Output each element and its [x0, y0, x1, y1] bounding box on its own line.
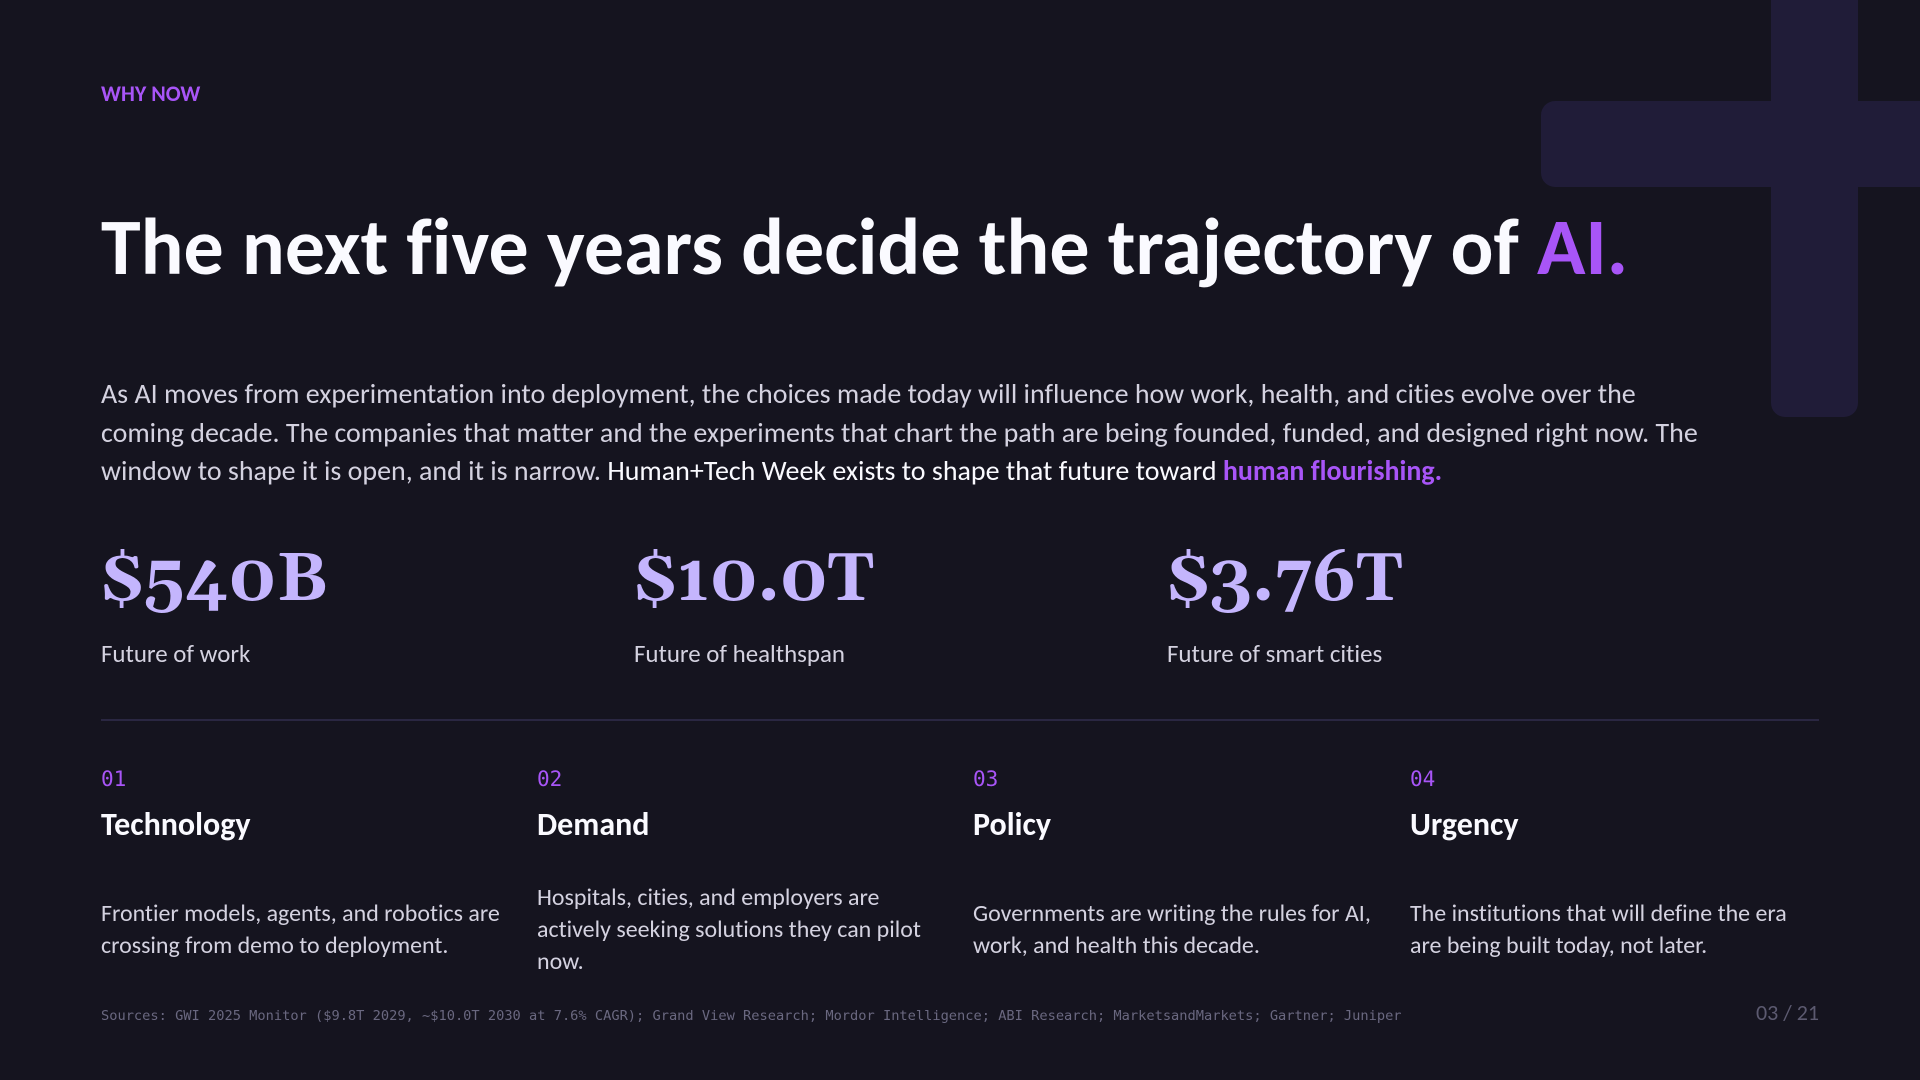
pillar 01 description: crossing from demo to deployment. — [101, 931, 448, 960]
page number: 03 / 21 — [1756, 999, 1819, 1026]
pillar 02 heading: Demand — [537, 805, 649, 844]
pillar 02 description: now. — [537, 947, 584, 976]
pillar 04 description — [1410, 899, 1787, 960]
pillar 03 heading: Policy — [973, 805, 1051, 844]
pillar 04 number: 04 — [1410, 767, 1435, 791]
body paragraph — [101, 376, 1698, 488]
pillar 04 description: are being built today, not later. — [1410, 931, 1707, 960]
pillar 01 description: Frontier models, agents, and robotics are — [101, 899, 500, 928]
pillar 03 description — [973, 899, 1371, 960]
eyebrow label: WHY NOW — [101, 80, 200, 107]
pillar 02 description — [537, 883, 921, 976]
body paragraph: window to shape it is open, and it is narrow. Human+Tech Week exists to shape that future toward human flourishing. — [101, 453, 1442, 488]
pillar 02 description: Hospitals, cities, and employers are — [537, 883, 879, 912]
stat label: future of healthspan: Future of healthspan — [634, 638, 845, 669]
pillar 02 number: 02 — [537, 767, 562, 791]
decorative cross: vertical bar — [1771, 0, 1858, 417]
decorative cross: horizontal bar — [1541, 101, 1920, 187]
pillar 01 heading: Technology — [101, 805, 251, 844]
body paragraph: As AI moves from experimentation into deployment, the choices made today will influence how work, health, and cities evolve over the — [101, 376, 1636, 411]
pillar 04 description: The institutions that will define the era — [1410, 899, 1787, 928]
title: The next five years decide the trajectory of AI. — [101, 199, 1628, 296]
pillar 03 description: Governments are writing the rules for AI, — [973, 899, 1371, 928]
body paragraph: coming decade. The companies that matter and the experiments that chart the path are being founded, funded, and designed right now. The — [101, 415, 1698, 450]
pillar 03 number: 03 — [973, 767, 998, 791]
stat: future of healthspan: $10.0T — [633, 538, 874, 624]
stat label: future of smart cities: Future of smart cities — [1167, 638, 1382, 669]
pillar 04 heading: Urgency — [1410, 805, 1519, 844]
stat: future of smart cities: $3.76T — [1166, 538, 1403, 624]
pillar 01 number: 01 — [101, 767, 126, 791]
pillar 02 description: actively seeking solutions they can pilot — [537, 915, 921, 944]
pillar 01 description — [101, 899, 500, 960]
stat: future of work: $540B — [100, 538, 328, 624]
stat label: future of work: Future of work — [101, 638, 250, 669]
pillar 03 description: work, and health this decade. — [973, 931, 1260, 960]
sources footnote: Sources: GWI 2025 Monitor ($9.8T 2029, ~$10.0T 2030 at 7.6% CAGR); Grand View Research; Mordor Intelligence; ABI Research; MarketsandMarkets; Gartner; Juniper — [101, 1008, 1402, 1024]
